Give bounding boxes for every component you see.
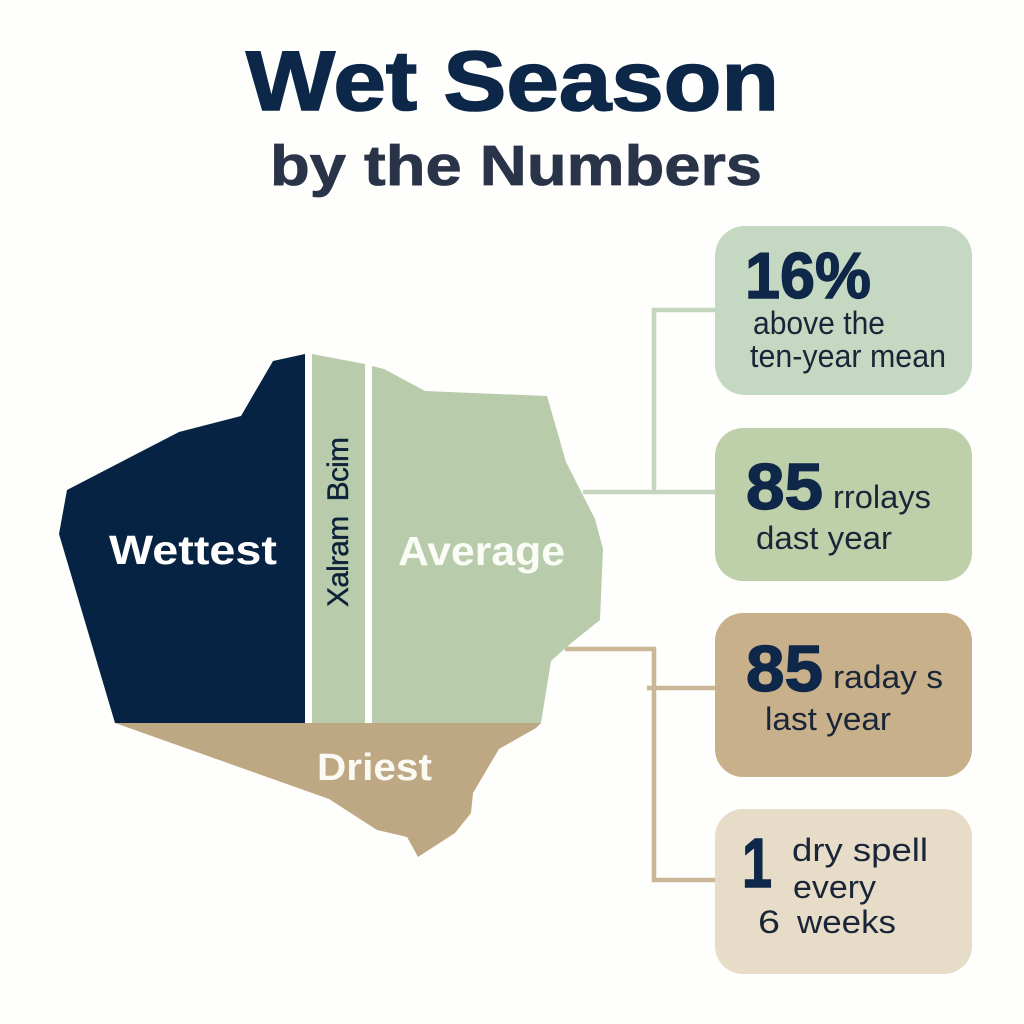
title: by the Numbers xyxy=(270,134,762,198)
stat card: 85 raday s last year: last year xyxy=(765,701,891,737)
stat card: 85 rrolays dast year: rrolays xyxy=(833,479,931,515)
stat card: 85 rrolays dast year xyxy=(715,428,972,581)
stat card: 85 raday s last year: 85 xyxy=(746,632,823,705)
stat card: 85 rrolays dast year: dast year xyxy=(756,520,892,556)
stat card: 16% above the ten-year mean: 16% xyxy=(745,239,871,312)
stat card: 1 dry spell every 6 weeks xyxy=(715,809,972,974)
connector lines: green xyxy=(583,310,715,492)
stat card: 1 dry spell every 6 weeks: 6 xyxy=(758,904,780,940)
region: driest xyxy=(115,723,541,857)
region: wettest: Wettest xyxy=(109,527,277,573)
region: wettest xyxy=(59,354,305,723)
stat card: 85 raday s last year xyxy=(715,613,972,777)
stat card: 16% above the ten-year mean xyxy=(715,226,972,395)
title: Wet Season xyxy=(246,34,779,128)
stat card: 85 raday s last year: raday s xyxy=(833,659,943,695)
stat card: 85 rrolays dast year: 85 xyxy=(746,450,823,523)
stat card: 16% above the ten-year mean: ten-year mean xyxy=(750,338,946,374)
stat card: 1 dry spell every 6 weeks: weeks xyxy=(796,904,896,940)
stat card: 1 dry spell every 6 weeks: dry spell xyxy=(792,832,928,868)
region: average: Average xyxy=(398,528,565,574)
stat card: 16% above the ten-year mean: above the xyxy=(753,305,885,341)
region: driest: Driest xyxy=(317,747,432,789)
map of regions xyxy=(59,354,603,857)
stat card: 1 dry spell every 6 weeks: 1 xyxy=(742,824,772,902)
title xyxy=(246,34,779,198)
connector lines: tan xyxy=(565,649,715,880)
region: central strip: Xalram Bcim xyxy=(322,437,355,607)
region: central strip xyxy=(312,354,365,723)
region: average xyxy=(372,366,603,723)
stat card: 1 dry spell every 6 weeks: every xyxy=(793,869,876,905)
